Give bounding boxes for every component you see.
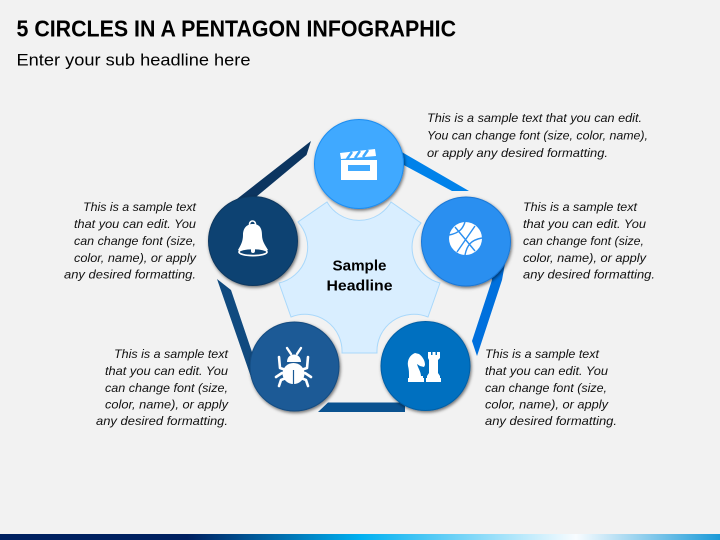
text block: left: any desired formatting. — [64, 268, 196, 282]
text block: bottom right: This is a sample text — [485, 347, 600, 361]
text block: right — [523, 200, 655, 282]
footer gradient bar — [0, 534, 720, 540]
text block: bottom left: any desired formatting. — [96, 414, 228, 428]
subtitle: Enter your sub headline here — [16, 50, 251, 70]
text block: left: color, name), or apply — [74, 251, 197, 265]
arrow: bottom-left to left segment — [217, 279, 262, 380]
text block: left — [64, 200, 197, 282]
circle: bottom-left with bug — [250, 322, 339, 411]
text block: bottom left: can change font (size, — [105, 381, 228, 395]
text block: bottom right: can change font (size, — [485, 381, 607, 395]
text block: right: that you can edit. You — [523, 217, 646, 231]
arrow: top to right segment — [400, 151, 469, 191]
text block: bottom left: that you can edit. You — [105, 364, 228, 378]
text block: bottom right: any desired formatting. — [485, 414, 617, 428]
text block: right: any desired formatting. — [523, 268, 655, 282]
text block: bottom left — [96, 347, 229, 428]
circle: top with clapperboard — [314, 120, 404, 208]
text block: left: can change font (size, — [74, 234, 196, 248]
text block: left: This is a sample text — [83, 200, 197, 214]
text block: right: can change font (size, — [523, 234, 644, 248]
circle: bottom-right with chess pieces — [381, 322, 470, 410]
text block: right: color, name), or apply — [523, 251, 647, 265]
arrow: left to top segment — [228, 141, 311, 206]
text block: bottom right: color, name), or apply — [485, 398, 609, 412]
icon: clapperboard — [340, 149, 377, 180]
arrow: right to bottom-right segment — [472, 258, 506, 356]
central pentagon panel — [279, 202, 440, 353]
text block: bottom left: This is a sample text — [114, 347, 229, 361]
title: 5 CIRCLES IN A PENTAGON INFOGRAPHIC — [16, 16, 456, 42]
icon: bug — [276, 348, 311, 386]
pentagon ring segments — [217, 141, 506, 412]
text block: bottom left: color, name), or apply — [105, 398, 229, 412]
arrow: bottom-right to bottom-left segment — [318, 402, 405, 412]
text block: top right: You can change font (size, color, name), — [427, 128, 648, 142]
circle: left with bell — [208, 196, 298, 286]
text block: right: This is a sample text — [523, 200, 638, 214]
text block: bottom right: that you can edit. You — [485, 364, 608, 378]
icon: chess knight and rook — [408, 352, 441, 382]
center headline: Sample — [332, 258, 386, 274]
center headline: Headline — [326, 278, 392, 294]
text block: left: that you can edit. You — [74, 217, 196, 231]
icon: bell — [238, 221, 268, 256]
text block: top right: This is a sample text that you can edit. — [427, 111, 642, 125]
text block: bottom right — [485, 347, 617, 428]
text block: top right — [427, 111, 648, 160]
icon: basketball — [449, 222, 482, 255]
text block: top right: or apply any desired formatting. — [427, 146, 608, 160]
circle: right with basketball — [422, 197, 510, 286]
center headline — [326, 258, 392, 294]
